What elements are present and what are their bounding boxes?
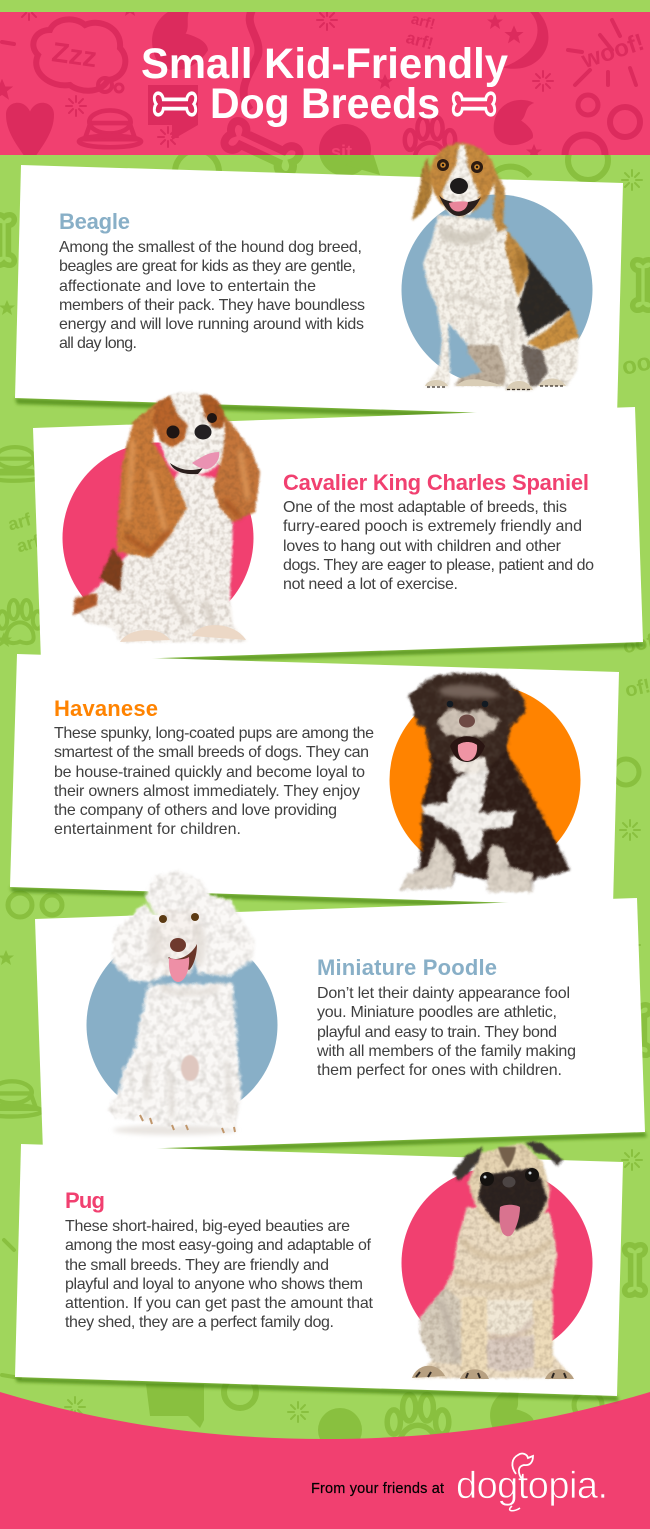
title: Small Kid-Friendly: [141, 40, 508, 88]
icon: cavalier spaniel photo: [73, 392, 260, 642]
body: pug: among the most easy-going and adaptable of: [65, 1237, 372, 1254]
body: pug: These short-haired, big-eyed beauties are: [65, 1218, 350, 1235]
body: cavalier: not need a lot of exercise.: [283, 576, 458, 593]
body: beagle: affectionate and love to entertain the: [59, 278, 316, 295]
body: beagle: all day long.: [59, 335, 137, 352]
header band: arf!: [409, 11, 437, 33]
icon: havanese photo: [400, 673, 570, 892]
body: cavalier: [283, 499, 594, 593]
panel: beagle: [15, 165, 623, 417]
body: cavalier: One of the most adaptable of breeds, this: [283, 499, 567, 516]
pattern: green doodles: arf: [14, 531, 43, 556]
icon: left bone: [154, 93, 196, 115]
header band: arf!: [404, 28, 435, 53]
body: havanese: These spunky, long-coated pups are among the: [54, 725, 374, 742]
text: poodle: [316, 955, 576, 1079]
footer credit: [311, 1454, 608, 1511]
title: [141, 40, 508, 128]
body: havanese: smartest of the small breeds of dogs. They can: [54, 744, 369, 761]
text: beagle: [59, 209, 365, 352]
header band: [0, 12, 650, 155]
panel: havanese: [10, 654, 619, 906]
body: havanese: be house-trained quickly and become loyal to: [54, 764, 365, 781]
body: havanese: the company of others and love providing: [54, 802, 337, 819]
body: pug: playful and loyal to anyone who shows them: [65, 1276, 363, 1293]
body: cavalier: dogs. They are eager to please, patient and do: [283, 557, 594, 574]
body: pug: attention. If you can get past the amount that: [65, 1295, 374, 1312]
body: beagle: beagles are great for kids as they are gentle,: [59, 258, 356, 275]
body: pug: [65, 1218, 374, 1331]
text: cavalier: [283, 470, 594, 593]
pattern: green doodles: arf: [6, 509, 34, 535]
heading: poodle: Miniature Poodle: [317, 955, 497, 980]
text: pug: [65, 1188, 374, 1331]
body: cavalier: loves to hang out with children and other: [283, 538, 562, 555]
header band: Zzz: [50, 36, 99, 73]
heading: cavalier: Cavalier King Charles Spaniel: [283, 470, 589, 495]
footer credit: From your friends at: [311, 1481, 444, 1497]
icon: beagle photo: [412, 143, 579, 390]
body: poodle: Don’t let their dainty appearance fool: [317, 985, 570, 1002]
icon: right bone: [453, 93, 495, 115]
body: beagle: energy and will love running around with kids: [59, 316, 364, 333]
body: poodle: [316, 985, 576, 1079]
panel: cavalier king charles spaniel: [33, 407, 643, 662]
panel: miniature poodle: [35, 898, 645, 1152]
footer curve: [0, 1392, 650, 1529]
header band: woof!: [577, 29, 648, 74]
icon: miniature poodle photo: [108, 870, 255, 1135]
icon: pug photo: [412, 1142, 574, 1379]
body: poodle: them perfect for ones with children.: [317, 1062, 562, 1079]
panel: pug: [15, 1144, 623, 1396]
body: pug: the small breeds. They are friendly and: [65, 1257, 329, 1274]
heading: pug: Pug: [65, 1188, 105, 1213]
header band: sit: [331, 142, 352, 162]
body: poodle: with all members of the family making: [316, 1043, 576, 1060]
text: havanese: [54, 696, 374, 838]
body: poodle: you. Miniature poodles are athletic,: [317, 1004, 557, 1021]
body: havanese: entertainment for children.: [54, 821, 241, 838]
body: havanese: their owners almost immediately. They enjoy: [54, 783, 360, 800]
body: beagle: members of their pack. They have boundless: [59, 297, 365, 314]
body: cavalier: furry-eared pooch is extremely friendly and: [283, 518, 582, 535]
body: poodle: playful and easy to train. They bond: [317, 1024, 557, 1041]
body: havanese: [54, 725, 374, 838]
heading: beagle: Beagle: [59, 209, 130, 234]
body: beagle: Among the smallest of the hound dog breed,: [59, 239, 362, 256]
heading: havanese: Havanese: [54, 696, 158, 721]
card shadows: [10, 398, 647, 1401]
logo: dogtopia: dogtopia.: [456, 1465, 608, 1507]
body: beagle: [59, 239, 365, 352]
title: Dog Breeds: [210, 80, 440, 128]
body: pug: they shed, they are a perfect family dog.: [65, 1314, 334, 1331]
